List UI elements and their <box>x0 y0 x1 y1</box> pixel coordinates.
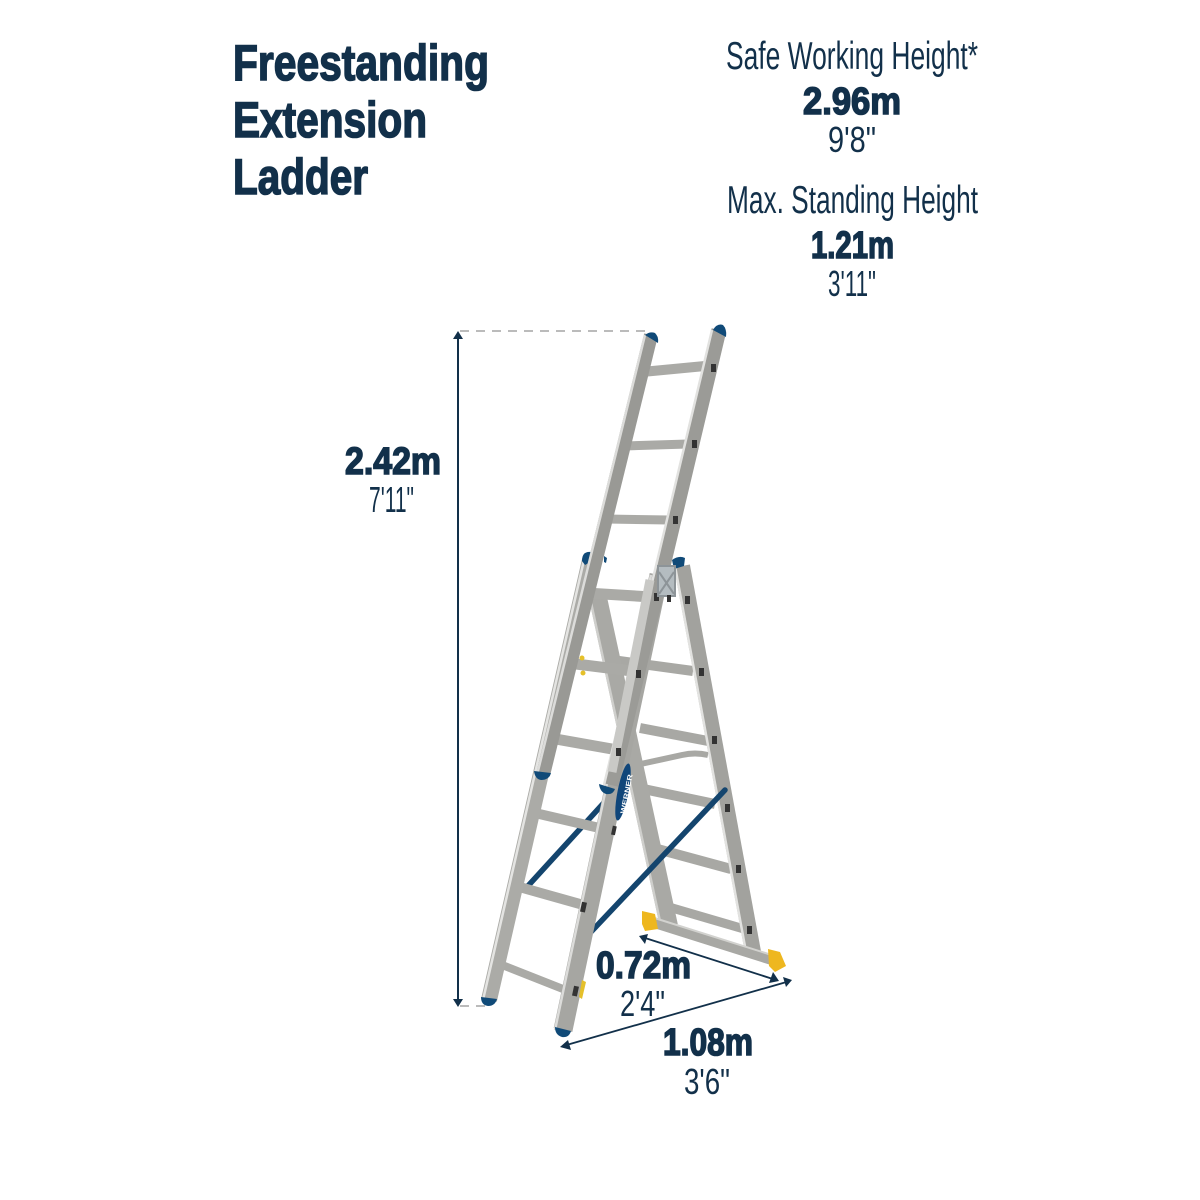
title: Extension <box>233 92 427 148</box>
text block: safe working height: 9'8" <box>828 119 876 160</box>
front section left stile <box>483 560 590 1000</box>
height dimension arrow <box>453 331 648 1007</box>
title: Freestanding <box>233 35 489 91</box>
text block: safe working height: Safe Working Height* <box>726 35 978 78</box>
small yellow catches <box>579 656 586 999</box>
text block: max standing height: 3'11" <box>828 263 876 304</box>
ladder illustration <box>481 325 786 1037</box>
rear top cap <box>672 557 685 569</box>
front width label <box>663 1022 753 1102</box>
title <box>233 35 489 205</box>
icon: yellow feet <box>642 911 786 972</box>
rear foot bar <box>645 915 778 962</box>
front width label: 1.08m <box>663 1022 753 1064</box>
front width dimension arrow <box>560 977 792 1050</box>
rear width dimension arrow <box>639 934 779 983</box>
rear section stiles <box>590 566 753 952</box>
text block: max standing height: 1.21m <box>811 225 894 267</box>
top extension caps <box>534 325 726 794</box>
logo badge <box>612 762 635 822</box>
text block: safe working height <box>726 35 978 160</box>
height label <box>345 441 441 520</box>
title: Ladder <box>233 149 368 205</box>
front section caps <box>481 552 607 1037</box>
hinge mechanism <box>658 566 675 602</box>
height label: 7'11" <box>369 479 414 520</box>
height label: 2.42m <box>345 441 441 483</box>
top extension right stile <box>604 330 719 785</box>
rear width label <box>596 945 691 1024</box>
front section rungs <box>497 593 652 991</box>
text block: max standing height: Max. Standing Height <box>727 179 978 222</box>
text block: safe working height: 2.96m <box>803 81 901 123</box>
text block: max standing height <box>727 179 978 304</box>
top extension rungs <box>606 366 705 520</box>
rear width label: 2'4" <box>620 983 665 1024</box>
front section right stile <box>555 575 659 1030</box>
rear section rungs <box>612 660 744 929</box>
blue cross braces <box>527 790 725 933</box>
rear width label: 0.72m <box>596 945 691 987</box>
front width label: 3'6" <box>684 1061 730 1102</box>
logo badge: WERNER <box>620 774 635 814</box>
top extension left stile <box>537 335 651 775</box>
